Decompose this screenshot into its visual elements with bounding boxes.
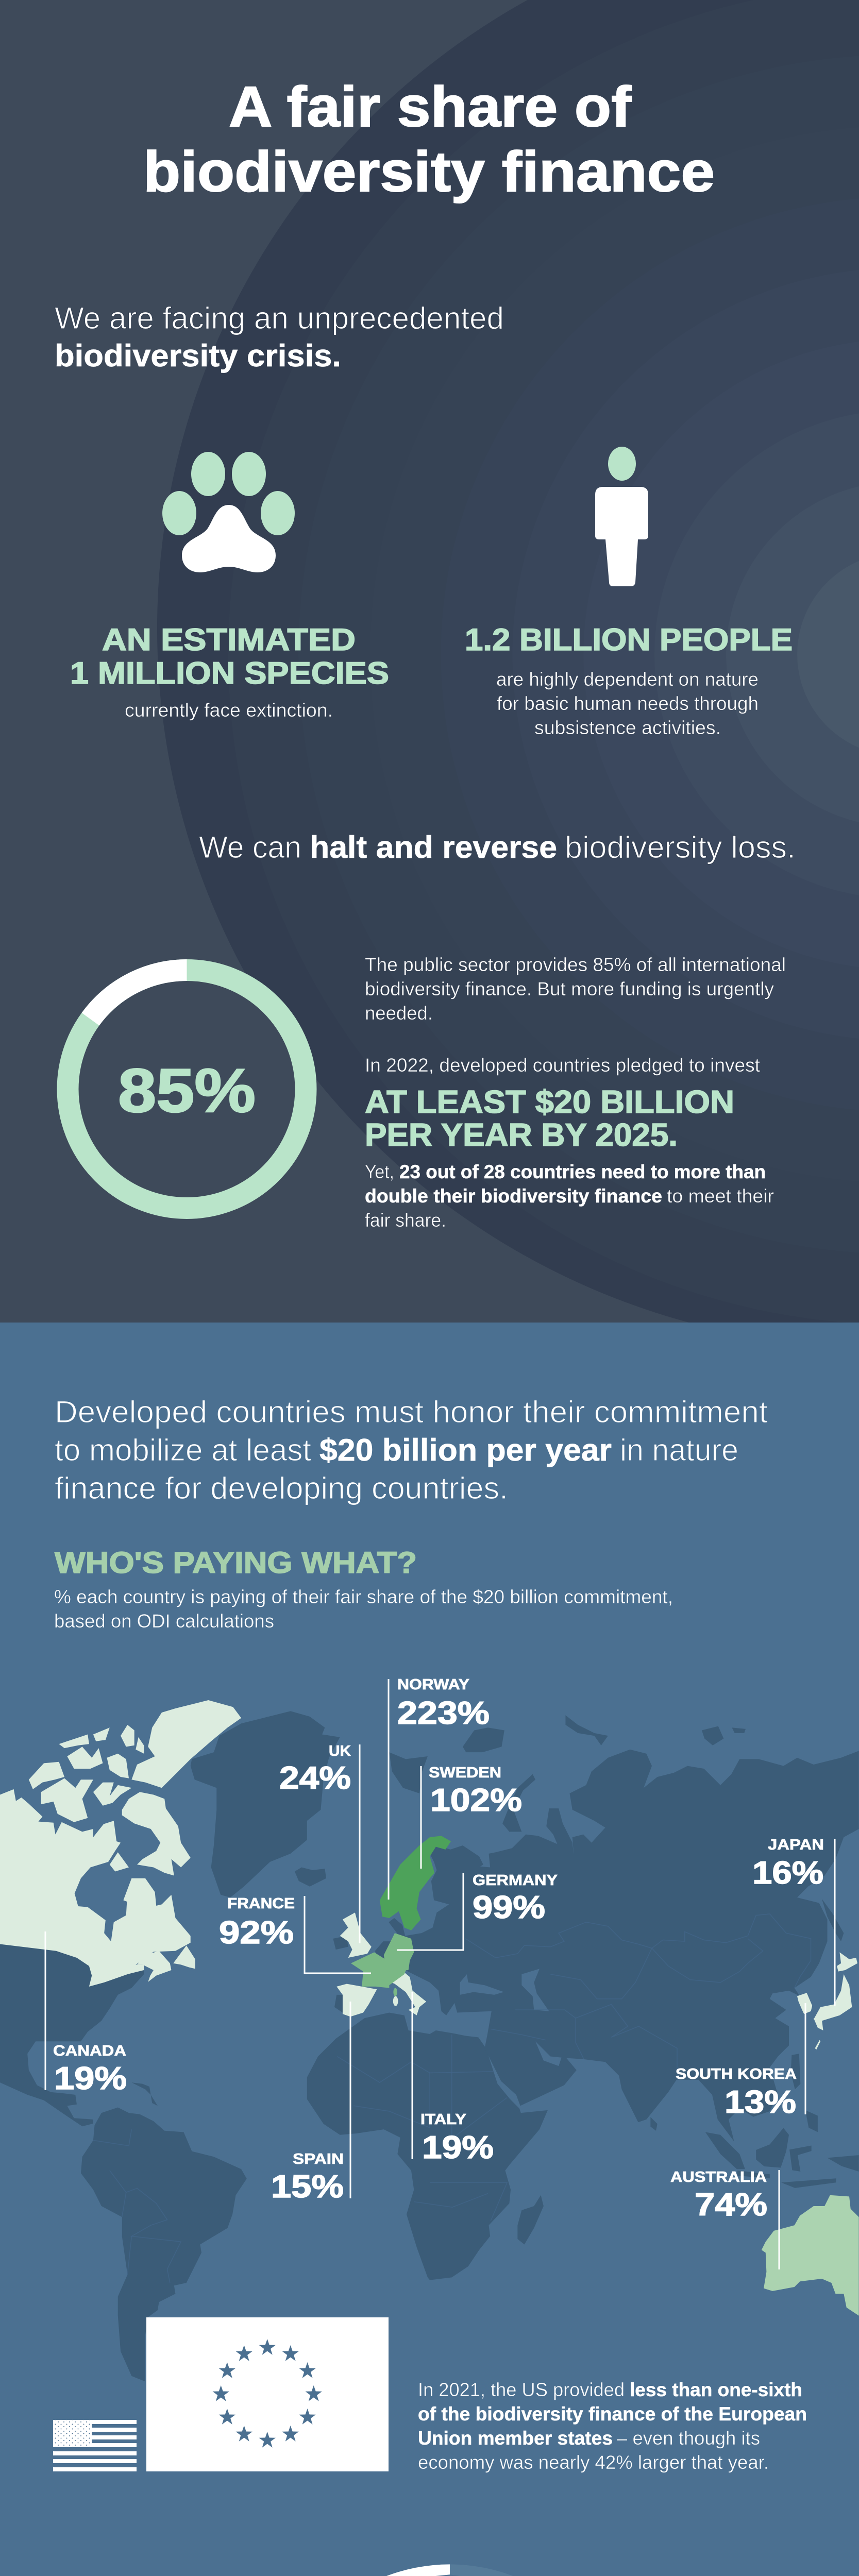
label: Japan bbox=[752, 1837, 835, 2006]
text block: public sector and pledge: needed. bbox=[365, 1003, 433, 1024]
label: Norway bbox=[389, 1676, 490, 1900]
heading: unprecedented crisis: biodiversity crisis. bbox=[55, 338, 341, 373]
heading: halt and reverse: biodiversity loss. bbox=[565, 830, 796, 865]
label: Canada bbox=[45, 1931, 127, 2096]
label: Canada: 19% bbox=[54, 2061, 127, 2096]
stat: 1.2 billion people: 1.2 BILLION PEOPLE bbox=[465, 622, 793, 657]
text block: public sector and pledge: AT LEAST $20 BILLION bbox=[365, 1084, 734, 1120]
icon: globe bbox=[272, 2564, 628, 2576]
icon: EU flag bbox=[146, 2317, 389, 2471]
label: Italy bbox=[412, 1992, 494, 2165]
stat: one million species: AN ESTIMATED bbox=[102, 622, 356, 657]
title: A fair share of bbox=[229, 75, 631, 139]
label: Japan: 16% bbox=[752, 1855, 823, 1891]
text block: US vs EU: less than one-sixth bbox=[630, 2379, 802, 2400]
text block: public sector and pledge: to meet their bbox=[667, 1185, 774, 1207]
heading: who's paying what: % each country is paying of their fair share of the $20 billion commitment, bbox=[54, 1586, 673, 1607]
stat: 1.2 billion people bbox=[465, 622, 793, 738]
label: UK: UK bbox=[329, 1743, 351, 1759]
icon: paw bbox=[162, 452, 295, 572]
label: Australia: 74% bbox=[695, 2187, 767, 2223]
stat: 1.2 billion people: are highly dependent on nature bbox=[496, 669, 759, 690]
panel: who's paying what bbox=[0, 1323, 859, 2576]
label: Japan: JAPAN bbox=[768, 1837, 824, 1853]
label: France: 92% bbox=[219, 1915, 294, 1951]
heading: who's paying what: based on ODI calculations bbox=[54, 1611, 274, 1632]
text block: US vs EU: Union member states bbox=[418, 2428, 613, 2449]
heading: halt and reverse: halt and reverse bbox=[310, 830, 557, 865]
heading: unprecedented crisis bbox=[55, 301, 504, 373]
map: world bbox=[0, 1700, 859, 2381]
text block: public sector and pledge: The public sector provides 85% of all international bbox=[365, 954, 786, 975]
chart: 85 percent donut bbox=[68, 970, 306, 1208]
label: France bbox=[219, 1895, 371, 1973]
label: Italy: ITALY bbox=[420, 2111, 466, 2128]
heading: unprecedented crisis: We are facing an unprecedented bbox=[55, 301, 504, 335]
heading: who's paying what bbox=[54, 1546, 673, 1632]
text block: public sector and pledge: double their biodiversity finance bbox=[365, 1185, 662, 1207]
label: Germany: 99% bbox=[473, 1890, 545, 1925]
label: Sweden bbox=[421, 1765, 522, 1869]
highlighted countries bbox=[0, 1700, 859, 2316]
label: South Korea bbox=[676, 2003, 805, 2120]
text block: public sector and pledge: 23 out of 28 countries need to more than bbox=[399, 1161, 766, 1182]
label: Sweden: SWEDEN bbox=[429, 1765, 501, 1781]
label: South Korea: SOUTH KOREA bbox=[676, 2066, 797, 2082]
text block: public sector and pledge: PER YEAR BY 2025. bbox=[365, 1117, 678, 1153]
text block: US vs EU: In 2021, the US provided bbox=[418, 2379, 625, 2400]
label: UK: 24% bbox=[279, 1760, 351, 1796]
stat: 1.2 billion people: for basic human needs through bbox=[497, 693, 759, 714]
icon: US flag bbox=[53, 2420, 137, 2471]
label: UK bbox=[279, 1743, 360, 1943]
stat: one million species: currently face extinction. bbox=[125, 700, 333, 721]
heading: honor commitment: Developed countries must honor their commitment bbox=[55, 1395, 768, 1429]
heading: honor commitment bbox=[55, 1395, 768, 1505]
text block: public sector and pledge: fair share. bbox=[365, 1210, 446, 1231]
text block: US vs EU bbox=[418, 2379, 807, 2473]
stat: 1.2 billion people: subsistence activities. bbox=[534, 717, 721, 738]
heading: honor commitment: $20 billion per year bbox=[319, 1433, 612, 1467]
panel: biodiversity crisis bbox=[0, 0, 859, 1323]
text block: US vs EU: – even though its bbox=[617, 2428, 760, 2449]
text block: public sector and pledge: Yet, bbox=[365, 1161, 394, 1182]
label: Spain: SPAIN bbox=[293, 2151, 344, 2167]
label: Norway: 223% bbox=[397, 1696, 490, 1731]
text block: public sector and pledge bbox=[365, 954, 786, 1231]
heading: honor commitment: finance for developing countries. bbox=[55, 1471, 508, 1505]
heading: who's paying what: WHO'S PAYING WHAT? bbox=[55, 1546, 417, 1580]
title: biodiversity finance bbox=[143, 140, 715, 204]
label: Germany: GERMANY bbox=[473, 1872, 558, 1889]
title bbox=[143, 75, 715, 204]
label: Spain: 15% bbox=[271, 2169, 344, 2205]
heading: honor commitment: to mobilize at least bbox=[55, 1433, 311, 1467]
label: Germany bbox=[397, 1872, 558, 1950]
text block: public sector and pledge: biodiversity finance. But more funding is urgently bbox=[365, 978, 774, 999]
heading: honor commitment: in nature bbox=[620, 1433, 738, 1467]
text block: US vs EU: economy was nearly 42% larger that year. bbox=[418, 2452, 769, 2473]
label: South Korea: 13% bbox=[725, 2084, 796, 2120]
label: Spain bbox=[271, 2002, 350, 2205]
label: Sweden: 102% bbox=[430, 1783, 522, 1818]
chart: 85 percent donut: 85% bbox=[118, 1056, 256, 1125]
heading: halt and reverse bbox=[199, 830, 796, 865]
label: Canada: CANADA bbox=[53, 2043, 126, 2059]
text block: US vs EU: of the biodiversity finance of the European bbox=[418, 2403, 807, 2425]
icon: person bbox=[595, 447, 648, 586]
stat: one million species: 1 MILLION SPECIES bbox=[70, 656, 389, 690]
label: Australia: AUSTRALIA bbox=[670, 2169, 767, 2185]
label: Norway: NORWAY bbox=[397, 1676, 469, 1693]
heading: halt and reverse: We can bbox=[199, 830, 301, 865]
label: France: FRANCE bbox=[227, 1895, 295, 1912]
label: Italy: 19% bbox=[422, 2130, 494, 2165]
label: Australia bbox=[670, 2169, 779, 2269]
text block: public sector and pledge: In 2022, developed countries pledged to invest bbox=[365, 1055, 761, 1076]
stat: one million species bbox=[70, 622, 389, 721]
